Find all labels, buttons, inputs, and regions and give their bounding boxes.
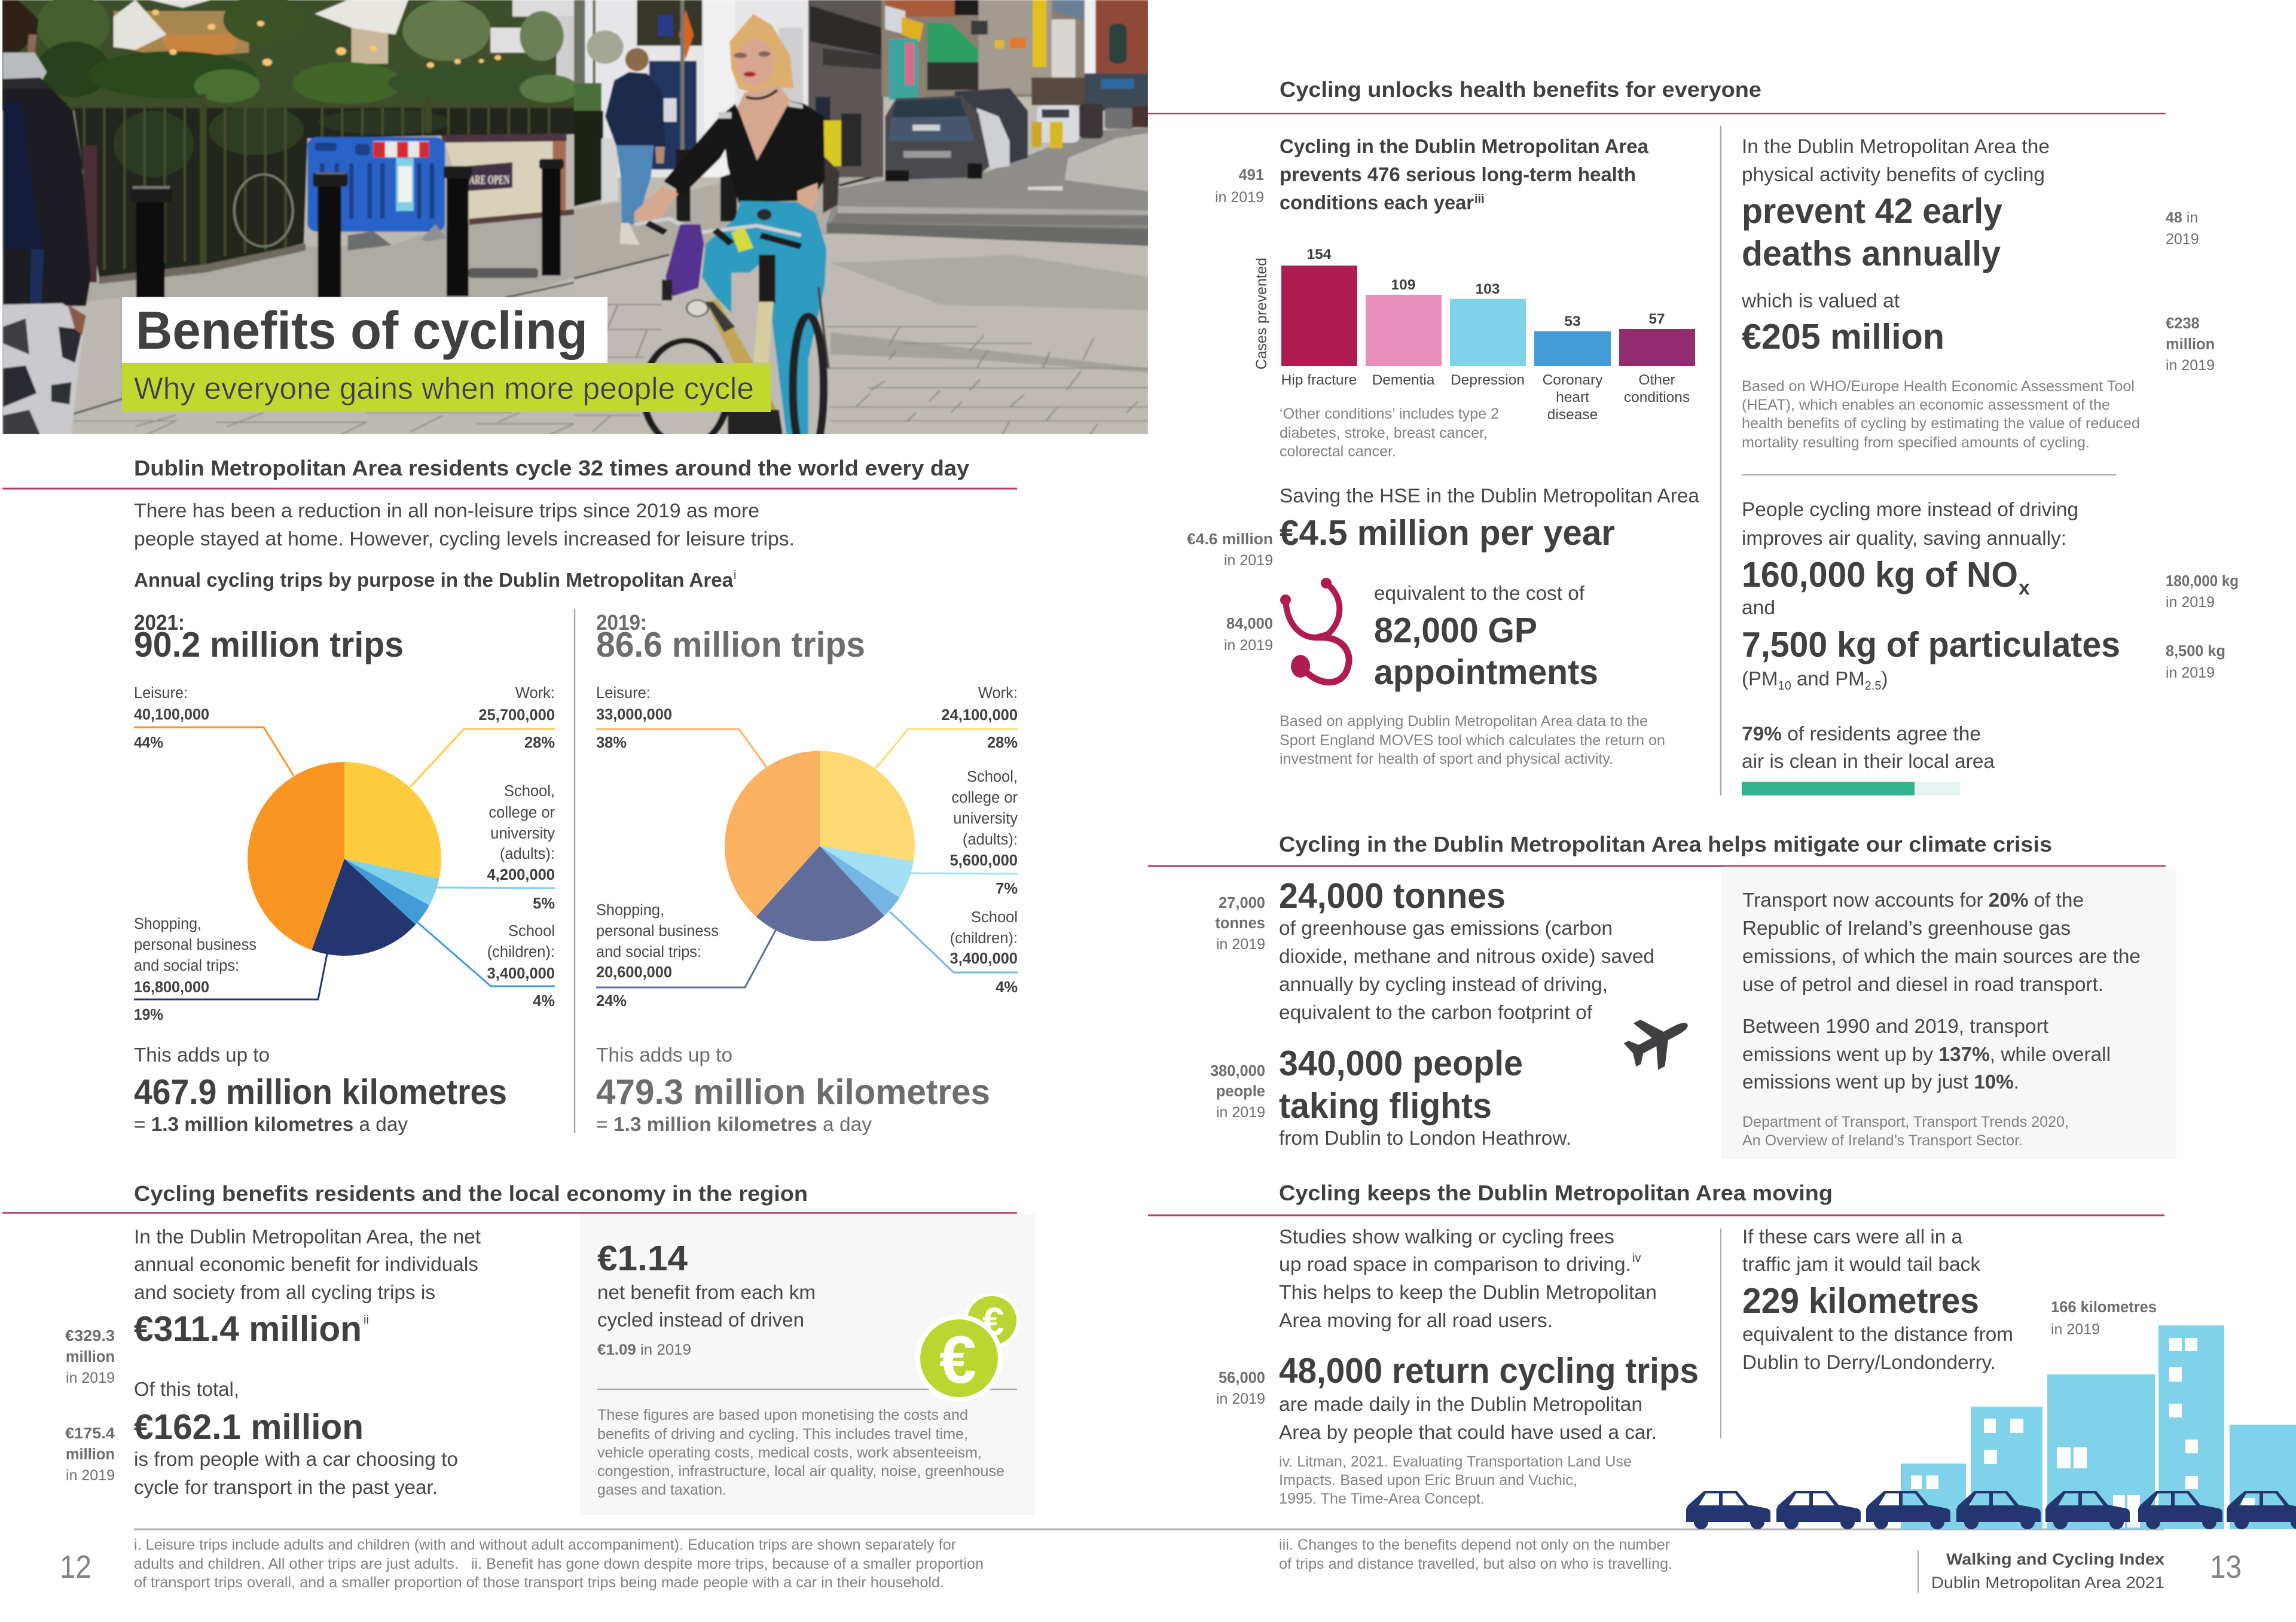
- 2019 total trips: 86.6 million trips: [596, 625, 865, 664]
- greenhouse gas block: 24,000 tonnes: [1279, 876, 1506, 916]
- HEAT note: health benefits of cycling by estimating the value of reduced: [1742, 415, 2140, 432]
- health conditions statement: conditions each year: [1280, 191, 1474, 214]
- shopping label 2019: and social trips:: [596, 944, 701, 961]
- early deaths block: which is valued at: [1741, 289, 1900, 312]
- greenhouse gas block: equivalent to the carbon footprint of: [1279, 1001, 1593, 1023]
- illustration: city buildings: [1901, 1325, 2296, 1529]
- photo left half: pedestrian, fence, bollards, barrier: [0, 0, 578, 435]
- work label: [410, 685, 555, 787]
- air quality block: 160,000 kg of NO: [1742, 555, 2018, 594]
- air quality block: 2.5: [1865, 679, 1881, 693]
- heading: residents cycle 32 times around the world: Dublin Metropolitan Area residents cycle 32 times around the world every day: [134, 456, 969, 480]
- intro text block: people stayed at home. However, cycling levels increased for leisure trips.: [134, 528, 795, 550]
- school adults label: School,: [504, 783, 555, 800]
- subtitle banner: Why everyone gains when more people cycle: [134, 371, 754, 406]
- 2019 comparison: 380,000 people: in 2019: [1216, 1104, 1265, 1121]
- MOVES note: Sport England MOVES tool which calculates the return on: [1280, 732, 1665, 749]
- road space block: [1279, 1225, 1699, 1443]
- road space block: Studies show walking or cycling frees: [1279, 1225, 1614, 1248]
- 2019 comparison: 56,000: 56,000: [1219, 1370, 1265, 1386]
- work label 2019: Work:: [978, 685, 1018, 702]
- road space block: iv: [1632, 1252, 1641, 1265]
- clean air statistic and progress bar: air is clean in their local area: [1742, 750, 1995, 772]
- work label: 28%: [524, 734, 555, 751]
- GP appointments: [1374, 582, 1598, 692]
- page number 13: 13: [2210, 1549, 2242, 1585]
- MOVES note: Based on applying Dublin Metropolitan Area data to the: [1280, 713, 1648, 730]
- leisure label 2019: Leisure:: [596, 685, 651, 702]
- school children label 2019: 4%: [996, 979, 1018, 996]
- health conditions statement: [1280, 135, 1649, 214]
- 2019 comparison: 84,000: [1224, 615, 1273, 654]
- 2019 comparison: 491: [1215, 167, 1264, 206]
- panel: transport emissions: [1721, 867, 2176, 1159]
- school adults label: [436, 783, 555, 912]
- heading: keeps Dublin moving: Cycling keeps the Dublin Metropolitan Area moving: [1279, 1181, 1833, 1205]
- greenhouse gas block: dioxide, methane and nitrous oxide) saved: [1279, 945, 1654, 967]
- 2019 comparison: 380,000 people: [1210, 1063, 1265, 1121]
- 2019 pie chart: [725, 751, 915, 941]
- traffic jam block: If these cars were all in a: [1742, 1225, 1963, 1248]
- 2019 comparison: 84,000: 84,000: [1226, 615, 1273, 632]
- 2019 comparison: 329.3 million: [65, 1328, 115, 1386]
- road space block: Area by people that could have used a car.: [1279, 1421, 1657, 1443]
- 2019 comparison: 380,000 people: 380,000: [1210, 1063, 1265, 1080]
- 2019 comparison: 27,000 tonnes: in 2019: [1216, 936, 1265, 953]
- 2021 total trips: 90.2 million trips: [134, 625, 404, 664]
- panel: transport emissions: Between 1990 and 2019, transport: [1742, 1015, 2048, 1037]
- air quality block: [1742, 498, 2120, 693]
- school children label 2019: [890, 909, 1018, 996]
- 2019 comparison: 329.3 million: €329.3: [65, 1328, 115, 1344]
- school adults label 2019: School,: [967, 769, 1018, 785]
- economic benefit text: is from people with a car choosing to: [134, 1448, 458, 1470]
- 2019 comparison: 175.4 million: [65, 1425, 115, 1484]
- leisure label: 44%: [134, 734, 163, 751]
- 2019 comparison: early deaths: [2166, 209, 2199, 248]
- MOVES note: [1280, 713, 1665, 767]
- MOVES note: investment for health of sport and physical activity.: [1280, 751, 1613, 767]
- panel: net benefit per km: gases and taxation.: [597, 1481, 726, 1498]
- publication credit: Dublin Metropolitan Area 2021: [1931, 1574, 2164, 1591]
- 2019 comparison: 329.3 million: million: [66, 1349, 115, 1365]
- bar chart: cases prevented: Coronary: [1543, 372, 1603, 388]
- footnotes left page: [134, 1536, 984, 1591]
- traffic jam block: [1742, 1225, 2013, 1373]
- early deaths block: deaths annually: [1742, 234, 2001, 273]
- bar chart: cases prevented: heart: [1556, 389, 1589, 406]
- traffic jam block: 229 kilometres: [1742, 1281, 1979, 1321]
- work label 2019: 28%: [987, 734, 1018, 751]
- economic benefit text: In the Dublin Metropolitan Area, the net: [134, 1225, 481, 1248]
- 2019 comparison: early deaths: 2019: [2166, 231, 2199, 248]
- early deaths block: [1741, 135, 2050, 356]
- 2019 total trips: 2019:: [596, 610, 647, 635]
- panel: 2019 trips: [596, 610, 1018, 1135]
- panel: transport emissions: emissions, of which the main sources are the: [1742, 945, 2141, 967]
- shopping label: [134, 916, 327, 1023]
- air quality block: 7,500 kg of particulates: [1742, 625, 2120, 664]
- school adults label: (adults):: [500, 846, 555, 862]
- icon: euro coins: €: [982, 1299, 1004, 1343]
- economic benefit text: ii: [364, 1313, 369, 1327]
- air quality block: and PM: [1791, 667, 1865, 690]
- note: other conditions: colorectal cancer.: [1280, 443, 1396, 460]
- school adults label: 4,200,000: [487, 867, 555, 883]
- shopping label 2019: personal business: [596, 923, 719, 940]
- leisure label: 40,100,000: [134, 706, 209, 723]
- road space block: This helps to keep the Dublin Metropolitan: [1279, 1281, 1657, 1303]
- school adults label: college or: [488, 804, 555, 821]
- HEAT note: Based on WHO/Europe Health Economic Assessment Tool: [1742, 378, 2135, 395]
- GP appointments: 82,000 GP: [1374, 611, 1537, 650]
- HSE saving: €4.5 million per year: [1280, 513, 1615, 553]
- heading: health benefits: Cycling unlocks health benefits for everyone: [1280, 77, 1761, 102]
- leisure label: [134, 685, 294, 776]
- school adults label 2019: 7%: [996, 880, 1018, 897]
- road space block: are made daily in the Dublin Metropolitan: [1279, 1393, 1642, 1415]
- bar chart: cases prevented: Cases prevented: [1253, 258, 1270, 370]
- Litman reference: 1995. The Time-Area Concept.: [1279, 1490, 1485, 1507]
- photo left half: pedestrian, fence, bollards, barrier: ARE OPEN: [469, 173, 509, 187]
- 2019 comparison: 27,000 tonnes: tonnes: [1215, 915, 1265, 932]
- intro text block: [134, 499, 795, 550]
- economic benefit text: [134, 1225, 481, 1498]
- bar chart: cases prevented: 109: [1391, 277, 1415, 293]
- clean air statistic and progress bar: 79% of residents agree the: [1742, 722, 1981, 745]
- 2019 comparison: 27,000 tonnes: 27,000: [1219, 895, 1265, 911]
- air quality block: x: [2019, 577, 2030, 599]
- air quality block: and: [1742, 596, 1775, 618]
- air quality block: People cycling more instead of driving: [1742, 498, 2078, 520]
- panel: transport emissions: Department of Transport, Transport Trends 2020,: [1742, 1114, 2069, 1130]
- school children label 2019: (children):: [950, 930, 1018, 947]
- 2019 comparison: 175.4 million: €175.4: [65, 1425, 115, 1442]
- 2019 comparison: 166 kilometres: [2051, 1299, 2157, 1338]
- traffic jam block: traffic jam it would tail back: [1742, 1253, 1980, 1275]
- work label 2019: [875, 685, 1018, 769]
- 2019 comparison: 238 million: in 2019: [2166, 357, 2215, 374]
- economic benefit text: €162.1 million: [134, 1407, 364, 1447]
- panel: net benefit per km: [580, 1214, 1034, 1515]
- Litman reference: iv. Litman, 2021. Evaluating Transportation Land Use: [1279, 1453, 1632, 1470]
- greenhouse gas block: [1279, 876, 1654, 1149]
- footnote right page: [1279, 1536, 1672, 1572]
- illustration: queue of cars: [1686, 1491, 2296, 1529]
- economic benefit text: annual economic benefit for individuals: [134, 1253, 478, 1275]
- heading: residents and local economy: Cycling benefits residents and the local economy in the region: [134, 1181, 808, 1206]
- economic benefit text: Of this total,: [134, 1378, 239, 1400]
- heading: climate crisis: Cycling in the Dublin Metropolitan Area helps mitigate our climate crisis: [1279, 832, 2052, 856]
- school children label: (children):: [487, 944, 555, 961]
- school adults label 2019: college or: [951, 789, 1018, 806]
- panel: transport emissions: Republic of Ireland’s greenhouse gas: [1742, 917, 2071, 939]
- 2019 comparison: 238 million: €238: [2166, 315, 2200, 332]
- footnotes left page: adults and children. All other trips are just adults. ii. Benefit has gone down despite more trips, because of a smaller proportion: [134, 1556, 984, 1572]
- 2019 comparison: NOx: 180,000 kg: [2166, 573, 2239, 590]
- note: other conditions: ‘Other conditions’ includes type 2: [1280, 406, 1499, 422]
- photo right half: cyclist, cars, shopfronts, road: [574, 0, 1149, 460]
- 2021 distance: 467.9 million kilometres: [134, 1072, 507, 1112]
- shopping label: 19%: [134, 1007, 163, 1023]
- 2019 comparison: early deaths: 48 in: [2166, 209, 2198, 226]
- chart heading: i: [734, 569, 736, 582]
- air quality block: 10: [1778, 679, 1791, 693]
- footnotes left page: i. Leisure trips include adults and children (with and without adult accompaniment). Education trips are shown separately for: [134, 1536, 956, 1553]
- air quality block: ): [1881, 667, 1888, 690]
- panel: net benefit per km: cycled instead of driven: [597, 1309, 804, 1331]
- school children label 2019: 3,400,000: [950, 950, 1018, 967]
- 2019 comparison: NOx: in 2019: [2166, 594, 2215, 611]
- school adults label: university: [490, 825, 555, 842]
- 2021 pie chart: [248, 762, 441, 956]
- intro text block: There has been a reduction in all non-leisure trips since 2019 as more: [134, 499, 759, 522]
- school adults label 2019: 5,600,000: [950, 852, 1018, 869]
- panel: net benefit per km: €1.14: [597, 1239, 688, 1278]
- Litman reference: [1279, 1453, 1632, 1507]
- traffic jam block: Dublin to Derry/Londonderry.: [1742, 1351, 1996, 1373]
- 2019 comparison: NOx: [2166, 573, 2239, 611]
- health conditions statement: iii: [1474, 193, 1485, 206]
- Litman reference: Impacts. Based upon Eric Bruun and Vuchic,: [1279, 1472, 1577, 1489]
- 2019 distance: This adds up to: [596, 1044, 732, 1066]
- 2021 total trips: 2021:: [134, 610, 185, 635]
- clean air statistic and progress bar: [1742, 722, 1995, 795]
- HEAT note: [1742, 378, 2140, 451]
- footer rule: [134, 1529, 2164, 1530]
- panel: net benefit per km: net benefit from each km: [597, 1281, 816, 1303]
- shopping label 2019: Shopping,: [596, 902, 664, 919]
- health conditions statement: Cycling in the Dublin Metropolitan Area: [1280, 135, 1649, 157]
- economic benefit text: and society from all cycling trips is: [134, 1281, 435, 1303]
- 2019 comparison: 84,000: in 2019: [1224, 637, 1273, 654]
- HSE saving: Saving the HSE in the Dublin Metropolitan Area: [1280, 484, 1700, 507]
- shopping label 2019: 24%: [596, 993, 627, 1010]
- 2019 comparison: 4.6 million: €4.6 million: [1187, 531, 1273, 548]
- leisure label 2019: [596, 685, 767, 767]
- panel: net benefit per km: congestion, infrastructure, local air quality, noise, greenhouse: [597, 1463, 1004, 1480]
- 2019 comparison: 238 million: million: [2166, 336, 2215, 353]
- 2019 comparison: 238 million: [2166, 315, 2215, 374]
- bar chart: cases prevented: conditions: [1624, 389, 1690, 406]
- leisure label 2019: 38%: [596, 734, 627, 751]
- 2019 distance: [596, 1044, 990, 1135]
- HEAT note: (HEAT), which enables an economic assessment of the: [1742, 397, 2110, 413]
- early deaths block: physical activity benefits of cycling: [1742, 163, 2045, 185]
- 2021 distance: This adds up to: [134, 1044, 270, 1066]
- health conditions statement: prevents 476 serious long-term health: [1280, 163, 1636, 185]
- air quality block: improves air quality, saving annually:: [1742, 527, 2066, 549]
- 2019 comparison: 56,000: [1216, 1370, 1265, 1407]
- panel: net benefit per km: €1.09 in 2019: [597, 1341, 691, 1358]
- panel: transport emissions: emissions went up by 137%, while overall: [1742, 1043, 2111, 1065]
- panel: transport emissions: An Overview of Ireland’s Transport Sector.: [1742, 1132, 2023, 1149]
- footnote right page: iii. Changes to the benefits depend not only on the number: [1279, 1536, 1670, 1553]
- 2019 comparison: 56,000: in 2019: [1216, 1391, 1265, 1407]
- 2021 distance: = 1.3 million kilometres a day: [134, 1113, 408, 1135]
- panel: 2021 trips: [134, 610, 555, 1135]
- chart heading: Annual cycling trips by purpose in the Dublin Metropolitan Area: [134, 569, 734, 591]
- icon: euro coins: €: [939, 1322, 976, 1397]
- shopping label: and social trips:: [134, 958, 239, 974]
- note: other conditions: [1280, 406, 1499, 460]
- 2019 comparison: 491: in 2019: [1215, 189, 1264, 206]
- HSE saving: [1280, 484, 1700, 553]
- page number 12: 12: [60, 1549, 91, 1585]
- school children label: [417, 922, 555, 1010]
- greenhouse gas block: from Dublin to London Heathrow.: [1279, 1127, 1571, 1149]
- early deaths block: prevent 42 early: [1742, 191, 2002, 231]
- 2019 comparison: 175.4 million: million: [66, 1446, 115, 1463]
- footnote right page: of trips and distance travelled, but also on who is travelling.: [1279, 1556, 1672, 1572]
- shopping label 2019: 20,600,000: [596, 964, 672, 981]
- economic benefit text: cycle for transport in the past year.: [134, 1476, 438, 1498]
- shopping label: 16,800,000: [134, 979, 209, 996]
- greenhouse gas block: 340,000 people: [1279, 1044, 1523, 1083]
- school adults label 2019: (adults):: [963, 831, 1018, 848]
- 2019 distance: 479.3 million kilometres: [596, 1072, 990, 1112]
- road space block: Area moving for all road users.: [1279, 1309, 1553, 1331]
- 2019 comparison: 380,000 people: people: [1216, 1083, 1265, 1100]
- road space block: up road space in comparison to driving.: [1279, 1253, 1631, 1275]
- greenhouse gas block: of greenhouse gas emissions (carbon: [1279, 917, 1613, 939]
- work label: Work:: [515, 685, 555, 702]
- leisure label 2019: 33,000,000: [596, 706, 672, 723]
- early deaths block: In the Dublin Metropolitan Area the: [1742, 135, 2050, 157]
- school adults label 2019: university: [953, 810, 1018, 827]
- HEAT note: mortality resulting from specified amounts of cycling.: [1742, 434, 2090, 451]
- shopping label: Shopping,: [134, 916, 201, 932]
- photo: woman cycling on a Dublin street: [0, 0, 1149, 460]
- 2019 comparison: particulates: 8,500 kg: [2166, 643, 2225, 660]
- road space block: 48,000 return cycling trips: [1279, 1351, 1699, 1391]
- bar chart: cases prevented: Depression: [1451, 372, 1525, 388]
- bar chart: cases prevented: disease: [1547, 407, 1598, 423]
- publication credit: [1918, 1550, 2164, 1593]
- footnotes left page: of transport trips overall, and a smaller proportion of those transport trips being made people with a car in their household.: [134, 1574, 944, 1591]
- leisure label: Leisure:: [134, 685, 188, 702]
- traffic jam block: equivalent to the distance from: [1742, 1323, 2013, 1345]
- 2019 comparison: 27,000 tonnes: [1215, 895, 1265, 953]
- early deaths block: €205 million: [1742, 317, 1944, 356]
- panel: transport emissions: use of petrol and diesel in road transport.: [1742, 973, 2103, 995]
- 2019 comparison: particulates: [2166, 643, 2225, 681]
- title: Benefits of cycling: Benefits of cycling: [136, 300, 588, 360]
- school children label 2019: School: [971, 909, 1018, 926]
- panel: net benefit per km: These figures are based upon monetising the costs and: [597, 1407, 968, 1423]
- shopping label 2019: [596, 902, 776, 1010]
- economic benefit text: €311.4 million: [134, 1309, 362, 1349]
- bar chart: cases prevented: 57: [1648, 311, 1665, 327]
- panel: net benefit per km: vehicle operating costs, medical costs, work absenteeism,: [597, 1444, 982, 1461]
- panel: transport emissions: Transport now accounts for 20% of the: [1742, 889, 2084, 911]
- 2019 comparison: 4.6 million: [1187, 531, 1273, 569]
- 2019 comparison: 166 kilometres: in 2019: [2051, 1321, 2100, 1338]
- GP appointments: equivalent to the cost of: [1374, 582, 1585, 604]
- school children label: School: [508, 923, 555, 940]
- greenhouse gas block: taking flights: [1279, 1086, 1492, 1126]
- 2021 distance: [134, 1044, 507, 1135]
- school adults label: 5%: [533, 895, 555, 912]
- note: other conditions: diabetes, stroke, breast cancer,: [1280, 425, 1488, 441]
- bar chart: cases prevented: 154: [1307, 246, 1332, 263]
- 2019 comparison: 491: 491: [1238, 167, 1264, 184]
- bar chart: cases prevented: Other: [1638, 372, 1675, 388]
- icon: aeroplane: [1617, 1001, 1700, 1078]
- 2019 comparison: particulates: in 2019: [2166, 664, 2215, 681]
- panel: transport emissions: emissions went up by just 10%.: [1742, 1071, 2019, 1093]
- publication credit: Walking and Cycling Index: [1946, 1550, 2164, 1568]
- school children label: 3,400,000: [487, 965, 555, 982]
- school children label: 4%: [533, 993, 555, 1010]
- work label 2019: 24,100,000: [941, 707, 1018, 724]
- work label: 25,700,000: [478, 707, 555, 724]
- greenhouse gas block: annually by cycling instead of driving,: [1279, 973, 1608, 995]
- school adults label 2019: [910, 769, 1018, 897]
- shopping label: personal business: [134, 937, 257, 953]
- GP appointments: appointments: [1374, 653, 1598, 692]
- icon: stethoscope: [1280, 578, 1349, 682]
- 2019 comparison: 166 kilometres: 166 kilometres: [2051, 1299, 2157, 1316]
- 2019 comparison: 4.6 million: in 2019: [1224, 552, 1273, 569]
- bar chart: cases prevented: [1253, 246, 1695, 423]
- 2019 comparison: 329.3 million: in 2019: [66, 1370, 115, 1386]
- 2019 comparison: 175.4 million: in 2019: [66, 1467, 115, 1484]
- bar chart: cases prevented: Dementia: [1372, 372, 1435, 388]
- subtitle banner: [122, 363, 771, 412]
- bar chart: cases prevented: 53: [1564, 313, 1581, 330]
- 2019 distance: = 1.3 million kilometres a day: [596, 1113, 872, 1135]
- bar chart: cases prevented: 103: [1476, 281, 1500, 297]
- panel: net benefit per km: benefits of driving and cycling. This includes travel time,: [597, 1426, 968, 1443]
- bar chart: cases prevented: Hip fracture: [1281, 372, 1357, 388]
- air quality block: (PM: [1742, 667, 1778, 690]
- icon: euro coins: [915, 1292, 1020, 1402]
